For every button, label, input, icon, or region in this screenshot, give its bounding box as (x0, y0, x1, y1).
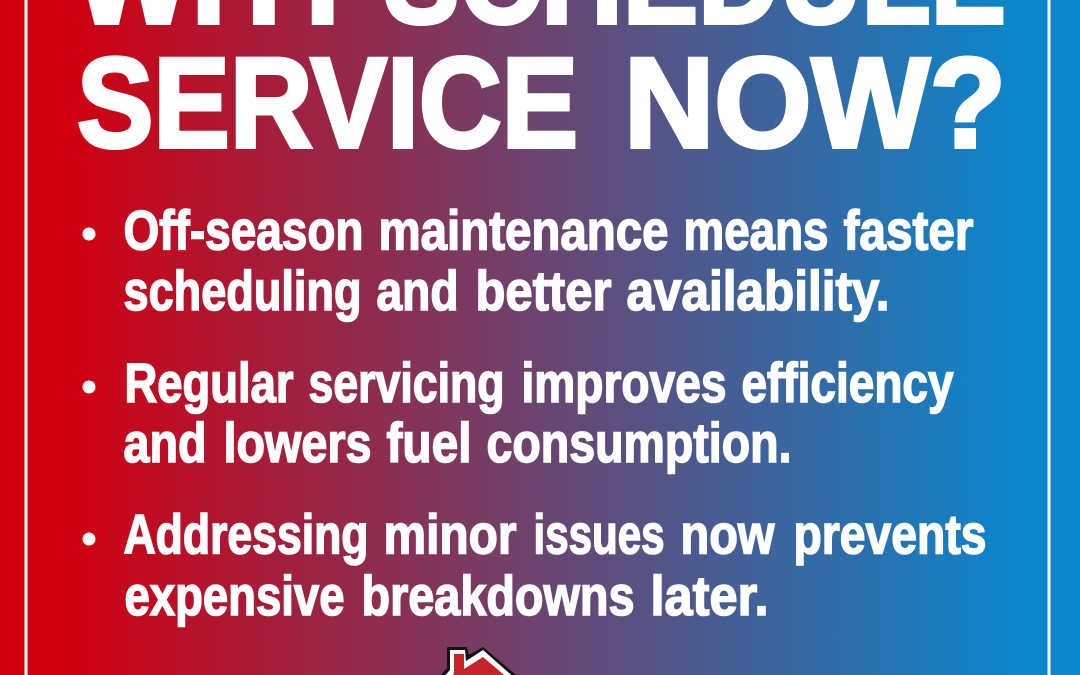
bullet 1: and (376, 259, 458, 322)
bullet 3 (82, 502, 986, 627)
bullet 3: prevents (794, 502, 986, 566)
bullet 1: faster (844, 198, 974, 262)
bullet 2: Regular (124, 351, 294, 414)
bullet 1: means (684, 198, 828, 262)
bullet 2: efficiency (742, 351, 954, 414)
title: NOW? (624, 32, 1006, 175)
bullet 2: improves (522, 351, 726, 414)
bullet 1: scheduling (124, 259, 362, 322)
bullet 2: fuel (386, 411, 472, 474)
bullet 1 (82, 198, 974, 322)
bullet 3: issues (534, 502, 664, 566)
title (74, 0, 1006, 175)
bullet 2: servicing (308, 351, 504, 414)
bullet 3: Addressing (124, 502, 368, 566)
bullet 3: breakdowns (362, 564, 634, 627)
bullet 3: expensive (124, 564, 344, 627)
bullet 2: lowers (224, 411, 372, 474)
bullet 2: and (124, 411, 206, 474)
bullet 2 (82, 351, 954, 474)
bullet 1: Off-season (124, 198, 364, 262)
bullet 3: minor (384, 502, 516, 566)
title: SERVICE (77, 32, 578, 175)
bullet list (82, 198, 986, 627)
bullet 3: now (680, 502, 775, 566)
bullet 1: better (476, 259, 612, 322)
bullet 3: later. (650, 564, 768, 627)
bullet 1: maintenance (378, 198, 668, 262)
icon: house logo (436, 647, 522, 675)
bullet 2: consumption. (486, 411, 792, 474)
bullet 1: availability. (626, 259, 890, 322)
